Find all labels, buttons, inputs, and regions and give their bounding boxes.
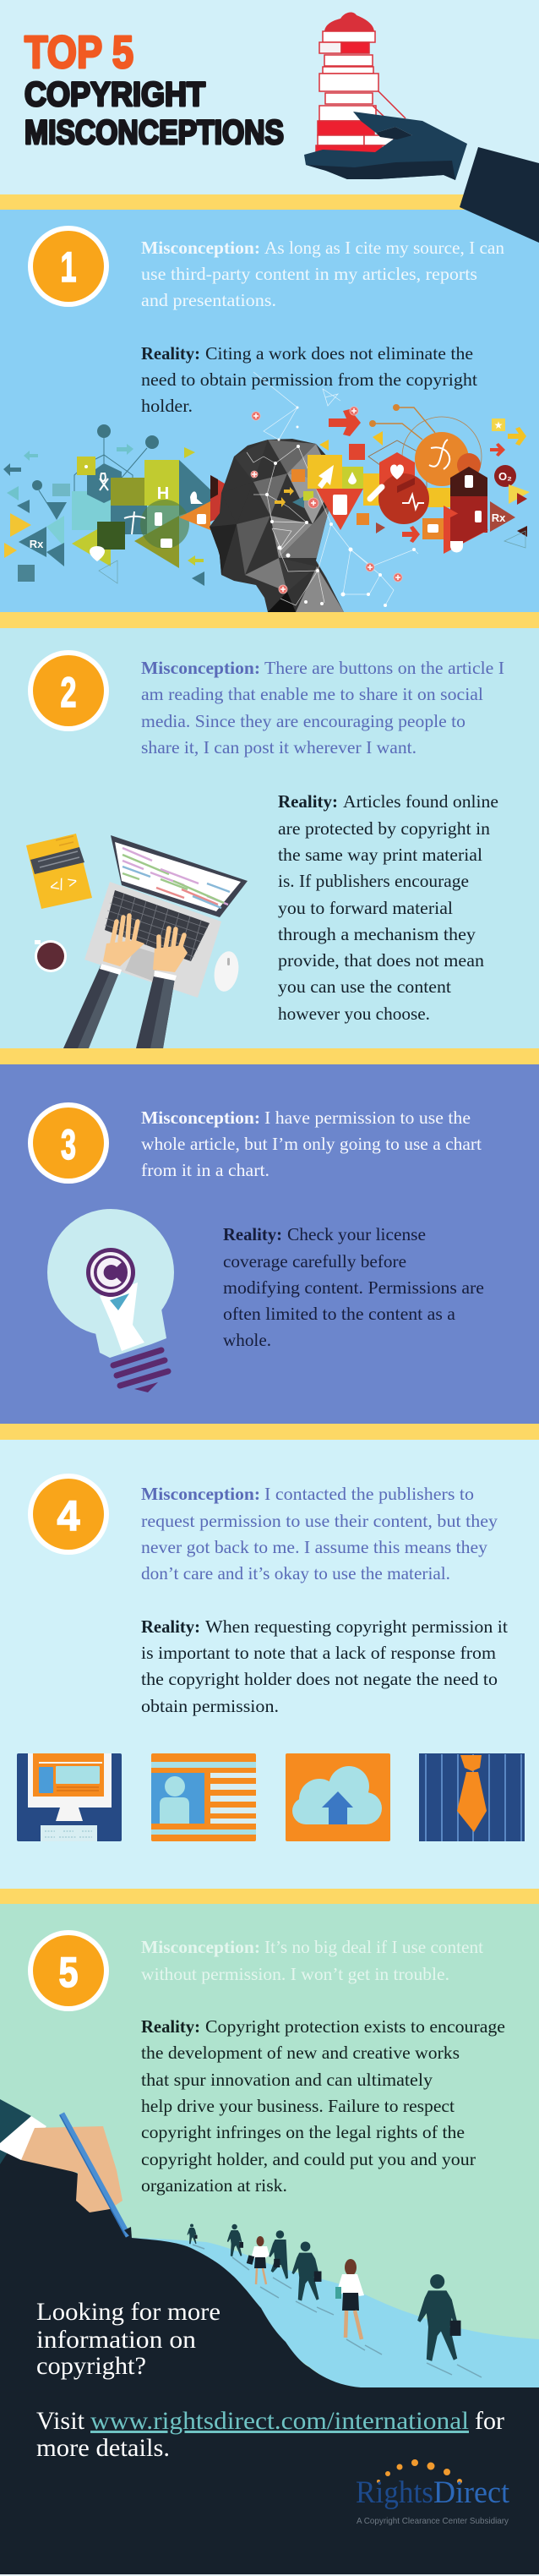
reality text 1: holder. [141, 396, 193, 416]
reality text 3: Reality: [223, 1224, 282, 1244]
reality text 3 [223, 1224, 484, 1350]
misconception text 3: I have permission to use the [264, 1108, 471, 1128]
icon: copyright light bulb [47, 1209, 174, 1392]
person 1 [188, 2223, 198, 2244]
network lines and dots [247, 372, 418, 607]
divider band: section 2 [0, 1048, 539, 1064]
reality text 4: obtain permission. [141, 1696, 279, 1716]
call to action text: www.rightsdirect.com/international [90, 2407, 469, 2435]
misconception text 1: Misconception: [141, 238, 260, 258]
misconception text 4: I contacted the publishers to [264, 1484, 474, 1504]
title: COPYRIGHT [24, 76, 205, 113]
misconception text 3: whole article, but I’m only going to use a chart [141, 1134, 482, 1154]
call to action text: for [475, 2407, 504, 2435]
reality text 4: is important to note that a lack of response from [141, 1643, 496, 1663]
reality text 2: Articles found online [343, 791, 498, 812]
misconception text 2 [141, 658, 504, 757]
icon: laptop [63, 835, 248, 1048]
number badge 1 [28, 226, 109, 307]
reality text 5: Reality: [141, 2016, 200, 2037]
reality text 5: the development of new and creative works [141, 2043, 460, 2063]
misconception text 1: and presentations. [141, 290, 276, 310]
reality text 2: you can use the content [278, 976, 451, 997]
title: TOP 5 [24, 27, 133, 78]
icon: desktop computer [17, 1753, 122, 1841]
left icon cluster: H [157, 484, 169, 503]
title: MISCONCEPTIONS [24, 114, 284, 151]
illustration: road and dark hill [0, 2150, 539, 2576]
reality text 2 [278, 791, 498, 1024]
reality text 2: are protected by copyright in [278, 818, 491, 839]
right icon cluster: ★ [494, 419, 503, 431]
number badge 5: 5 [59, 1949, 78, 1996]
person 7 [417, 2274, 461, 2361]
right icon cluster: Rx [492, 511, 506, 524]
number badge 4 [28, 1474, 109, 1555]
reality text 2: is. If publishers encourage [278, 871, 469, 891]
reality text 2: provide, that does not mean [278, 950, 485, 971]
misconception text 1: use third-party content in my articles, reports [141, 264, 477, 284]
call to action text: Visit [36, 2407, 85, 2435]
misconception text 5: It’s no big deal if I use content [264, 1937, 483, 1957]
number badge 3 [28, 1102, 109, 1184]
panel: misconception 3 [0, 1064, 539, 1424]
divider band: section 3 [0, 1424, 539, 1440]
number badge 3: 3 [61, 1121, 76, 1168]
icon: profile page [151, 1753, 256, 1841]
misconception text 4 [141, 1484, 498, 1583]
logo: RightsDirect: A Copyright Clearance Center Subsidiary [357, 2516, 509, 2526]
misconception text 4: never got back to me. I assume this means they [141, 1537, 488, 1557]
call to action text: copyright? [36, 2352, 146, 2380]
illustration: hand holding stack of books [304, 13, 539, 243]
hands and sleeves [63, 916, 188, 1048]
misconception text 3: from it in a chart. [141, 1160, 270, 1180]
reality text 4 [141, 1616, 508, 1716]
misconception text 3 [141, 1108, 482, 1180]
number badge 2: 2 [61, 669, 76, 716]
reality text 5: organization at risk. [141, 2175, 287, 2196]
misconception text 4: request permission to use their content, but they [141, 1511, 498, 1531]
logo: RightsDirect: Direct [433, 2475, 510, 2510]
call to action text [36, 2298, 504, 2462]
reality text 4: When requesting copyright permission it [205, 1616, 508, 1637]
divider band: section 1 [0, 612, 539, 628]
right icon cluster [319, 404, 530, 554]
reality text 2: the same way print material [278, 845, 482, 865]
sleeve [460, 147, 539, 243]
misconception text 2: Misconception: [141, 658, 260, 678]
misconception text 1 [141, 238, 505, 310]
misconception text 2: media. Since they are encouraging people to [141, 711, 466, 731]
title [24, 27, 284, 151]
misconception text 2: There are buttons on the article I [264, 658, 504, 678]
reality text 3: often limited to the content as a [223, 1304, 456, 1324]
icon: mouse [211, 949, 242, 993]
misconception text 2: share it, I can post it wherever I want. [141, 737, 416, 757]
misconception text 5 [141, 1937, 483, 1984]
misconception text 2: am reading that enable me to share it on social [141, 684, 483, 704]
divider band: section 4 [0, 1889, 539, 1904]
logo: RightsDirect: Rights [356, 2475, 433, 2510]
icon: cloud upload [286, 1753, 390, 1841]
panel: misconception 5 and footer [0, 1904, 539, 2576]
reality text 5: that spur innovation and can ultimately [141, 2070, 433, 2090]
reality text 2: you to forward material [278, 898, 453, 918]
reality text 5: Copyright protection exists to encourage [205, 2016, 505, 2037]
reality text 2: through a mechanism they [278, 924, 476, 944]
reality text 1: Reality: [141, 343, 200, 364]
number badge 2 [28, 650, 109, 731]
illustration: people walking [188, 2223, 482, 2377]
call to action text: Looking for more [36, 2298, 220, 2326]
reality text 3: coverage carefully before [223, 1251, 406, 1272]
illustration: laptop on desk [26, 834, 248, 1048]
reality text 3: whole. [223, 1330, 271, 1350]
icon: striped suit and tie [419, 1753, 525, 1841]
right icon cluster: O₂ [498, 470, 512, 483]
reality text 5 [141, 2016, 505, 2196]
left icon cluster [3, 424, 225, 586]
illustration: head with medical icons [3, 372, 530, 613]
icon: code book: </ > [48, 872, 79, 897]
person 3 woman [247, 2236, 270, 2284]
number badge 1: 1 [61, 243, 76, 291]
plus markers and head icons [251, 407, 402, 593]
reality text 3: modifying content. Permissions are [223, 1277, 484, 1298]
misconception text 4: Misconception: [141, 1484, 260, 1504]
reality text 1: Citing a work does not eliminate the [205, 343, 473, 364]
person 2 [227, 2224, 243, 2256]
stack of books [316, 13, 406, 158]
number badge 4: 4 [57, 1492, 80, 1540]
misconception text 1: As long as I cite my source, I can [264, 238, 505, 258]
person 5 [291, 2241, 321, 2301]
left icon cluster: Rx [30, 538, 44, 550]
divider band: header [0, 194, 539, 210]
reality text 5: help drive your business. Failure to respect [141, 2096, 455, 2116]
icon: coffee cup [35, 940, 67, 972]
low-poly head [210, 439, 344, 612]
misconception text 3: Misconception: [141, 1108, 260, 1128]
reality text 5: copyright holder, and could put you and your [141, 2149, 476, 2169]
reality text 3: Check your license [287, 1224, 426, 1244]
panel: header [0, 0, 539, 194]
misconception text 5: without permission. I won’t get in trouble. [141, 1964, 449, 1984]
logo: RightsDirect [356, 2459, 510, 2526]
panel: misconception 4 [0, 1440, 539, 1889]
call to action text: information on [36, 2326, 196, 2354]
illustration: hand with pencil [0, 2099, 132, 2239]
person 4 [269, 2230, 288, 2279]
misconception text 5: Misconception: [141, 1937, 260, 1957]
panel: misconception 2 [0, 628, 539, 1048]
panel: misconception 1 [0, 210, 539, 613]
icon: code book [26, 834, 92, 909]
gloved hand [304, 112, 467, 180]
person 6 woman [335, 2259, 364, 2339]
reality text 2: Reality: [278, 791, 338, 812]
reality text 2: however you choose. [278, 1004, 430, 1024]
call to action text: more details. [36, 2434, 170, 2462]
reality text 4: the copyright holder does not negate the need to [141, 1669, 498, 1689]
reality text 4: Reality: [141, 1616, 200, 1637]
reality text 5: copyright infringes on the legal rights of the [141, 2122, 465, 2142]
reality text 1 [141, 343, 477, 416]
reality text 1: need to obtain permission from the copyright [141, 369, 477, 390]
misconception text 4: don’t care and it’s okay to use the material. [141, 1563, 450, 1583]
number badge 5 [28, 1930, 109, 2011]
